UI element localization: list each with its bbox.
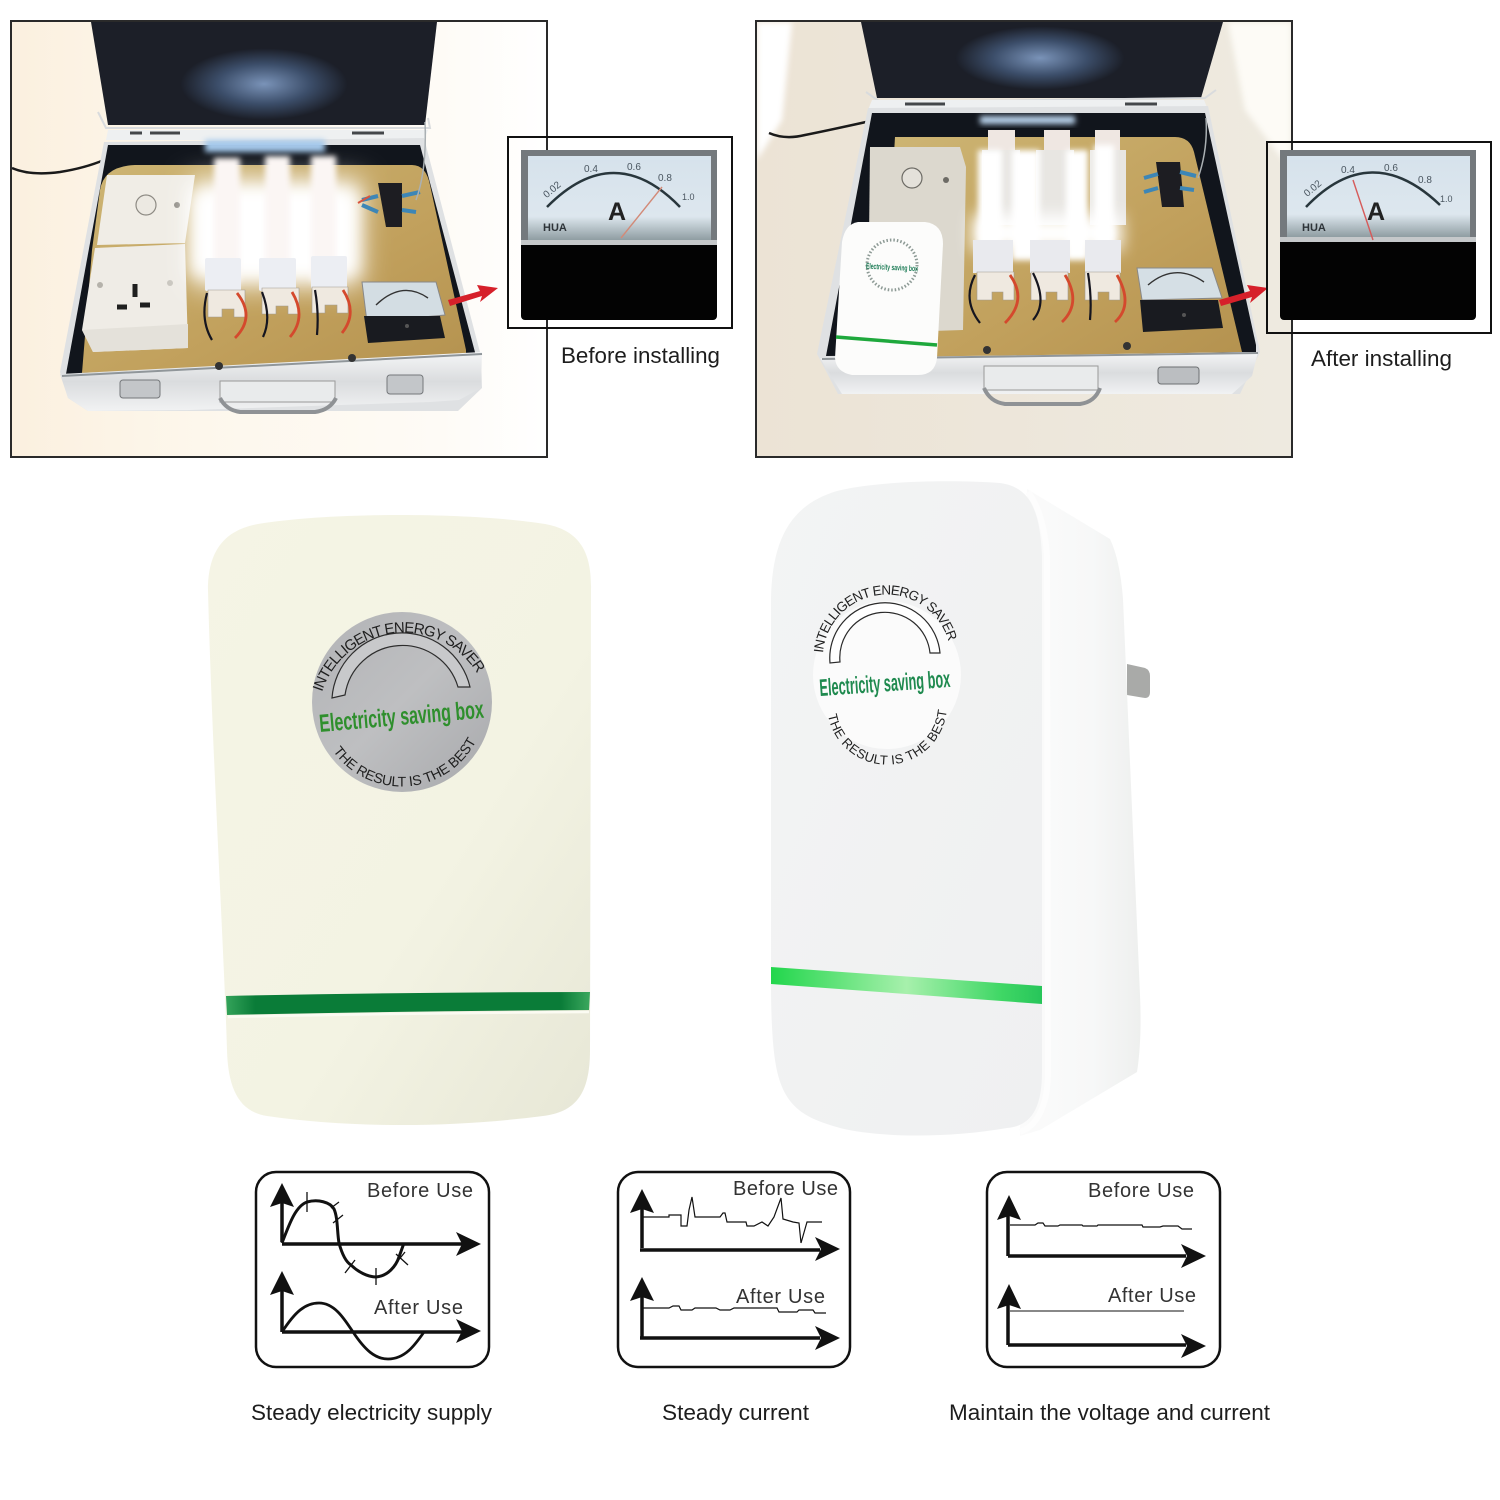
meter inset: before: 0.4 bbox=[584, 164, 598, 175]
photo frame bbox=[756, 21, 1292, 457]
panel: after installing photo bbox=[756, 21, 1292, 457]
arrow: to after meter bbox=[1219, 285, 1268, 306]
badge: Electricity saving box bbox=[318, 696, 485, 738]
meter inset: after: 0.8 bbox=[1418, 175, 1432, 186]
after use waveform bbox=[643, 1306, 826, 1313]
caption: steady current: Steady current bbox=[662, 1400, 809, 1425]
meter inset: before: 0.6 bbox=[627, 162, 641, 173]
label before: Before Use bbox=[733, 1178, 838, 1200]
small saver device bbox=[835, 222, 943, 375]
side body bbox=[1020, 489, 1141, 1136]
label before: Before Use bbox=[1088, 1180, 1194, 1202]
meter inset: after: 0.02 bbox=[1302, 178, 1324, 199]
badge: THE RESULT IS THE BEST bbox=[335, 736, 474, 786]
status light band bbox=[226, 992, 590, 1015]
label: after installing: After installing bbox=[1311, 346, 1452, 371]
label before: Before Use bbox=[367, 1180, 473, 1202]
before use waveform bbox=[282, 1192, 408, 1285]
axes after bbox=[270, 1271, 481, 1343]
badge: INTELLIGENT ENERGY SAVER bbox=[814, 585, 956, 652]
axes before bbox=[997, 1195, 1206, 1268]
band highlight bbox=[228, 1012, 589, 1017]
product: white angled view bbox=[771, 482, 1150, 1136]
badge: Electricity saving box bbox=[819, 666, 951, 702]
plug prong bbox=[1127, 664, 1150, 698]
chart: steady current bbox=[618, 1172, 850, 1367]
axes before bbox=[630, 1189, 840, 1261]
photo scene: briefcase test rig without saver bbox=[12, 22, 482, 456]
small saver device: Electricity saving box bbox=[866, 262, 918, 273]
meter inset: after: A bbox=[1367, 198, 1385, 226]
axes before bbox=[270, 1183, 481, 1256]
label: before installing: Before installing bbox=[561, 343, 720, 368]
front face bbox=[771, 481, 1042, 1136]
meter inset: before: 0.02 bbox=[541, 179, 564, 201]
badge: THE RESULT IS THE BEST bbox=[828, 709, 946, 764]
after use waveform bbox=[282, 1303, 424, 1359]
label after: After Use bbox=[1108, 1285, 1196, 1307]
lamps glow bbox=[972, 116, 1126, 260]
meter inset: after: 0.4 bbox=[1341, 165, 1355, 176]
device body bbox=[208, 515, 591, 1125]
badge: INTELLIGENT ENERGY SAVER bbox=[312, 622, 484, 691]
photo scene: briefcase test rig with saver bbox=[757, 22, 1291, 456]
axes after bbox=[630, 1277, 840, 1350]
photo frame bbox=[11, 21, 547, 457]
lamps glow bbox=[192, 140, 360, 285]
caption: steady electricity supply: Steady electricity supply bbox=[251, 1400, 492, 1425]
before use waveform bbox=[1010, 1223, 1192, 1229]
caption: maintain the voltage and current: Maintain the voltage and current bbox=[949, 1400, 1270, 1425]
chart: maintain voltage and current bbox=[987, 1172, 1220, 1367]
chart: steady electricity supply bbox=[256, 1172, 489, 1367]
label after: After Use bbox=[374, 1297, 463, 1319]
meter inset: before: 1.0 bbox=[682, 192, 695, 202]
meter inset: after: 0.6 bbox=[1384, 163, 1398, 174]
product: cream front view bbox=[208, 515, 591, 1125]
meter inset: after: 1.0 bbox=[1440, 194, 1453, 204]
axes after bbox=[997, 1284, 1206, 1358]
before use waveform bbox=[643, 1197, 822, 1243]
label after: After Use bbox=[736, 1286, 825, 1308]
after use waveform bbox=[1010, 1310, 1184, 1312]
meter inset: after bbox=[1267, 142, 1491, 333]
meter inset: before: A bbox=[608, 198, 626, 226]
arrow: to before meter bbox=[448, 285, 498, 306]
meter inset: before: 0.8 bbox=[658, 173, 672, 184]
rim highlight bbox=[1020, 492, 1048, 1132]
panel: before installing photo bbox=[11, 21, 547, 457]
badge bbox=[312, 612, 492, 792]
meter inset: before: HUA bbox=[543, 222, 567, 234]
meter inset: before bbox=[508, 137, 732, 328]
status light band bbox=[771, 967, 1042, 1004]
meter inset: after: HUA bbox=[1302, 222, 1326, 234]
badge bbox=[813, 585, 961, 764]
